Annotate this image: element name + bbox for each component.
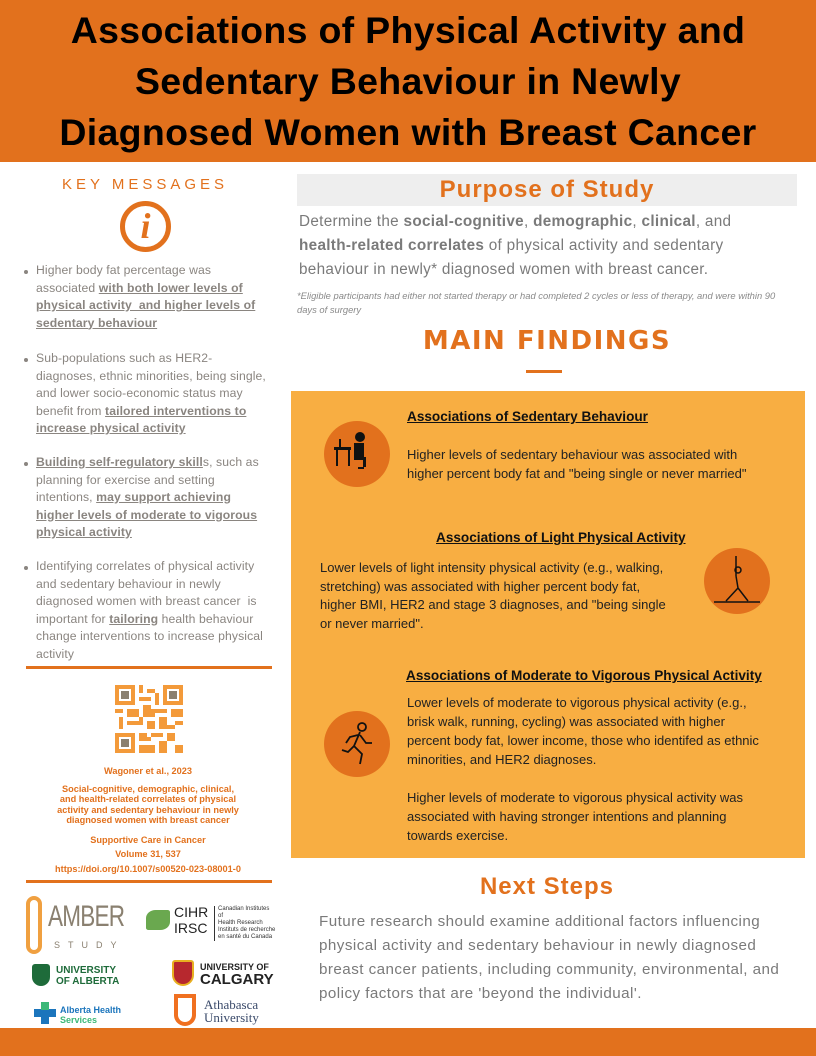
text — [407, 695, 759, 843]
citation — [55, 766, 241, 874]
panel: findings — [291, 391, 805, 858]
logos — [26, 896, 276, 1026]
text: Higher levels of moderate to vigorous physical activity was associated with having stronger intentions and planning towards exercise. — [407, 790, 743, 843]
logo: university of calgary: CALGARY — [200, 971, 274, 988]
logo: alberta health services: Alberta Health — [60, 1005, 121, 1015]
logo: university of alberta: UNIVERSITY — [56, 965, 116, 976]
logo: CIHR: IRSC — [174, 920, 207, 936]
citation: Volume 31, 537 — [115, 848, 181, 858]
finding: sedentary behaviour — [324, 409, 746, 487]
heading: Associations of Light Physical Activity — [436, 530, 686, 545]
text: purpose: Determine the social-cognitive, demographic, clinical, and health-related correlates of physical activity and sedentary behaviour in newly* diagnosed women with breast cancer. — [299, 213, 731, 278]
title: Associations of Physical Activity and — [71, 9, 745, 51]
icon: info: i — [140, 206, 150, 246]
logo: amber study — [26, 896, 125, 954]
heading: purpose of study: Purpose of Study — [440, 176, 654, 203]
panel: key messages — [24, 176, 266, 660]
logo: amber study: STUDY — [54, 940, 125, 950]
icon: person at desk — [324, 421, 390, 487]
finding: moderate to vigorous — [324, 668, 762, 843]
logo: amber study: AMBER — [48, 900, 124, 933]
logo: CIHR: CIHR — [174, 904, 208, 920]
footer bar — [0, 1028, 816, 1056]
text: next steps: Future research should examine additional factors influencing physical activity and sedentary behaviour in newly diagnosed breast cancer patients, including community, environmental, and policy factors that are 'beyond the individual'. — [319, 913, 779, 1002]
bullet list: Identifying correlates of physical activity and sedentary behaviour in newly diagnosed women with breast cancer is important for tailoring health behaviour change interventions to increase physical activity — [36, 559, 263, 660]
text: Lower levels of moderate to vigorous physical activity (e.g., brisk walk, running, cycling) was associated with higher percent body fat, lower income, those who identifed as ethnic minorities, and HER2 diagnoses. — [407, 695, 759, 767]
logo: CIHR: en santé du Canada — [218, 934, 272, 940]
bullet list — [24, 263, 266, 660]
QR code — [115, 685, 183, 753]
icon: runner — [324, 711, 390, 777]
logo: CIHR: Instituts de recherche — [218, 927, 275, 933]
heading: Associations of Sedentary Behaviour — [407, 409, 648, 424]
text: Lower levels of light intensity physical activity (e.g., walking, stretching) was associated with higher percent body fat, higher BMI, HER2 and stage 3 diagnoses, and "being single or never married". — [320, 560, 666, 630]
title: Sedentary Behaviour in Newly — [135, 60, 681, 102]
text: Higher levels of sedentary behaviour was associated with higher percent body fat and "being single or never married" — [407, 447, 746, 480]
logo: athabasca university: University — [204, 1010, 259, 1025]
citation: https://doi.org/10.1007/s00520-023-08001-0 — [55, 864, 241, 874]
logo: university of calgary: UNIVERSITY OF — [200, 962, 269, 972]
icon: yoga pose — [704, 548, 770, 614]
citation: activity and sedentary behaviour in newly — [57, 804, 239, 814]
logo: alberta health services: Services — [60, 1015, 97, 1025]
logo: university of alberta — [32, 964, 119, 987]
bullet list: Building self-regulatory skills, such as planning for exercise and setting intentions, may support achieving higher levels of moderate to vigorous physical activity — [36, 455, 259, 539]
logo: CIHR: Health Research — [218, 920, 263, 926]
footnote: *Eligible participants had either not started therapy or had completed 2 cycles or less of therapy, and were within 90 days of surgery — [297, 290, 775, 315]
logo: athabasca university: Athabasca — [204, 997, 258, 1012]
citation: diagnosed women with breast cancer — [66, 815, 230, 825]
logo: alberta health services — [34, 1002, 121, 1025]
title — [59, 9, 757, 153]
heading: next steps: Next Steps — [480, 873, 614, 900]
title: Diagnosed Women with Breast Cancer — [59, 111, 757, 153]
bullet list: Sub-populations such as HER2-diagnoses, ethnic minorities, being single, and lower socio-economic status may benefit from tailored interventions to increase physical activity — [36, 351, 266, 435]
icon: info — [120, 201, 171, 252]
logo: CIHR — [146, 904, 276, 941]
heading: purpose of study — [297, 174, 797, 206]
logo: university of alberta: OF ALBERTA — [56, 976, 119, 987]
citation: and health-related correlates of physical — [60, 794, 236, 804]
logo: CIHR: Canadian Institutes of — [218, 906, 269, 919]
finding: light physical activity — [320, 530, 770, 630]
header banner — [0, 0, 816, 162]
citation: Social-cognitive, demographic, clinical, — [62, 784, 234, 794]
logo: athabasca university — [174, 994, 259, 1026]
logo: university of calgary — [172, 960, 274, 988]
heading: Associations of Moderate to Vigorous Physical Activity — [406, 668, 762, 683]
citation: Wagoner et al., 2023 — [104, 766, 192, 776]
heading: key messages: KEY MESSAGES — [62, 176, 228, 193]
bullet list: Higher body fat percentage was associated with both lower levels of physical activity and higher levels of sedentary behaviour — [36, 263, 255, 330]
citation: Supportive Care in Cancer — [90, 834, 206, 844]
heading: main findings: MAIN FINDINGS — [423, 326, 671, 356]
